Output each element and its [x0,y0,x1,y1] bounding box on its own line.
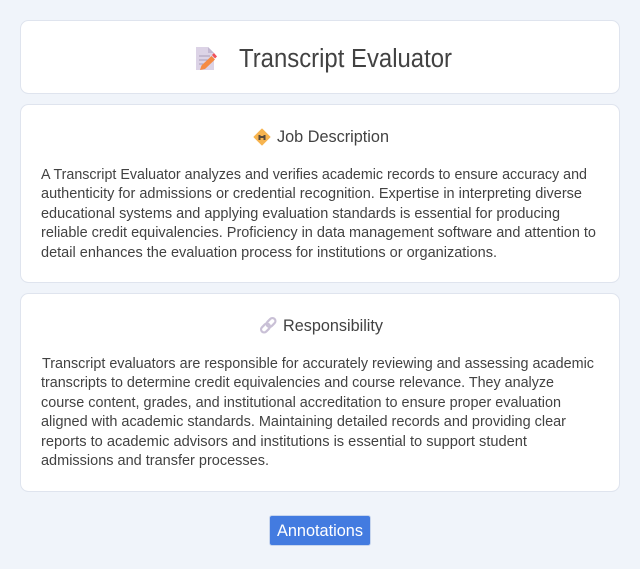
text: job description body: authenticity for admissions or credential recognition. Expertise in interpreting diverse [41,186,582,202]
text: job description body: A Transcript Evaluator analyzes and verifies academic records to ensure accuracy and [41,167,587,183]
icon: document with pencil [196,47,217,70]
text: responsibility body: Transcript evaluators are responsible for accurately reviewing and assessing academic [42,356,594,372]
text: responsibility body [41,356,594,469]
text: job description body: reliable credit equivalencies. Proficiency in data management software and attention to [41,225,596,241]
text: responsibility body: reports to academic advisors and institutions is essential to support student [41,434,527,450]
text: responsibility body: aligned with academic standards. Maintaining detailed records and providing clear [41,414,566,430]
text: responsibility body: admissions and transfer processes. [41,453,269,469]
panel: responsibility [20,294,620,492]
heading: job description: Job Description [277,128,389,146]
heading: title: Transcript Evaluator [239,45,452,73]
text: job description body: detail enhances the evaluation process for institutions or organizations. [41,245,497,261]
text: job description body [41,167,596,261]
text: responsibility body: transcripts to determine credit equivalencies and course relevance. They analyze [41,375,554,391]
panel: job description [20,104,620,282]
icon: chain link [260,317,277,334]
text: responsibility body: course content, grades, and institutional accreditation to ensure proper evaluation [41,395,561,411]
button: annotations: Annotations [277,522,363,540]
icon: diamond sign [254,129,270,145]
text: job description body: educational systems and applying evaluation standards is essential for producing [41,206,560,222]
heading: responsibility: Responsibility [283,317,384,335]
panel: title [20,20,620,94]
button: annotations [270,516,370,546]
